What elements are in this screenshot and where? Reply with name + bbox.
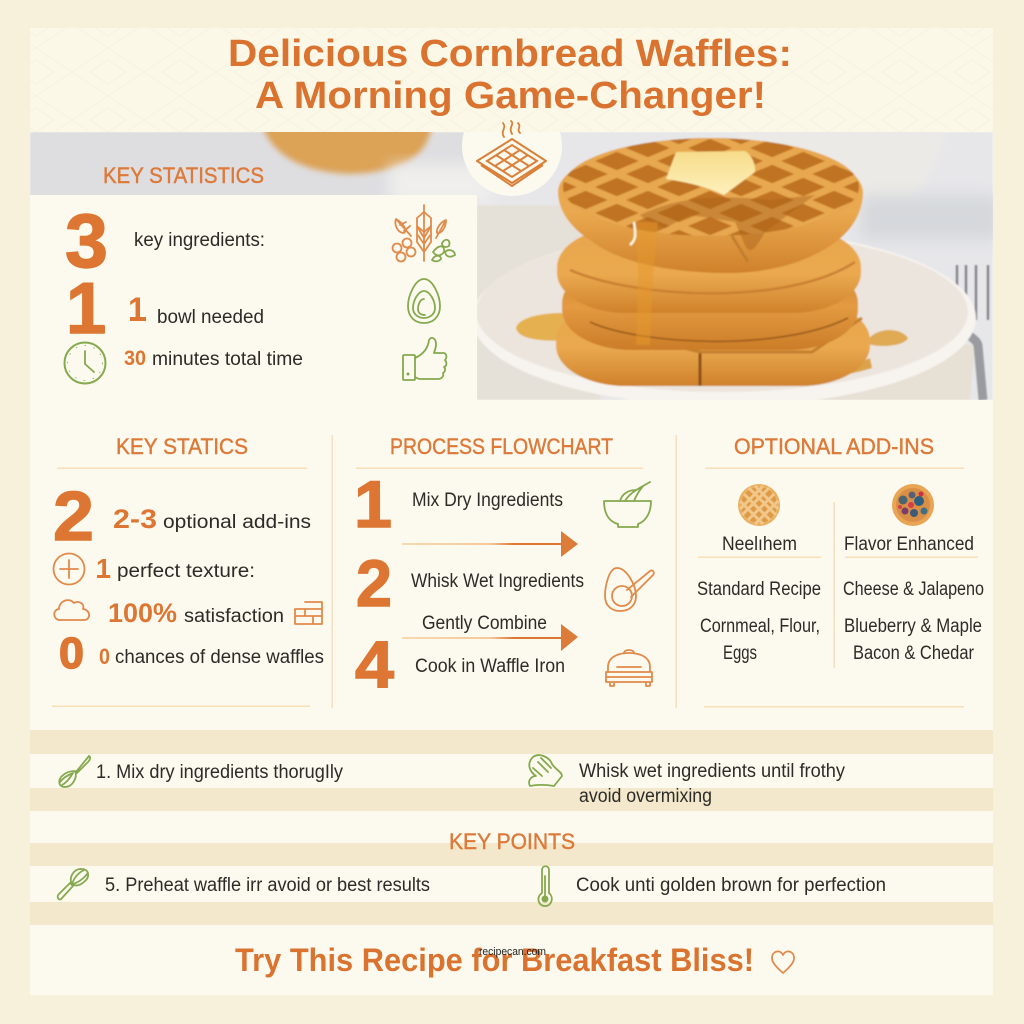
- stat: satisfaction: 100%: [108, 598, 177, 628]
- panel: key statistics top: [30, 163, 477, 410]
- icon: waffle badge: [462, 121, 562, 196]
- napkin: [477, 205, 600, 400]
- stat: perfect texture: [54, 553, 255, 584]
- icon: avocado: [408, 279, 440, 323]
- stat: 1 bowl needed: 1: [128, 291, 146, 329]
- stat: 3 key ingredients: 3: [65, 199, 108, 284]
- header banner: [30, 28, 993, 132]
- title: Delicious Cornbread Waffles:: [228, 33, 792, 75]
- stat: 0 dense waffles: 0: [59, 629, 84, 678]
- stat: satisfaction: [54, 598, 322, 628]
- syrup: [640, 195, 815, 250]
- step 1: [354, 467, 651, 541]
- stat: 30 minutes: 30: [124, 347, 146, 370]
- stat: 0 dense waffles: chances of dense waffles: [115, 647, 324, 668]
- column: flavor enhanced: Cheese & Jalapeno: [843, 579, 984, 600]
- icon: thumbs up: [403, 338, 446, 380]
- column: neelihem: Eggs: [723, 643, 757, 664]
- step 2: 2: [356, 546, 392, 620]
- heading: key statistics: KEY STATISTICS: [103, 163, 264, 188]
- panel: key statics column: [52, 434, 324, 707]
- tip 2: Whisk wet ingredients until frothy: [579, 761, 845, 782]
- stat: 0 dense waffles: 0: [99, 644, 110, 669]
- tip 2: [529, 755, 845, 807]
- tip 1: 1. Mix dry ingredients thorugIly: [96, 762, 343, 783]
- tip 4: Cook unti golden brown for perfection: [576, 875, 886, 896]
- step 1: Mix Dry Ingredients: [412, 490, 563, 511]
- syrup pools: [516, 313, 570, 341]
- blurred bowl: [735, 120, 945, 226]
- step 1: 1: [354, 467, 392, 541]
- icon: plain waffle: [738, 484, 780, 526]
- stat: 2-3 add-ins: [53, 477, 311, 555]
- stat: 0 dense waffles: [59, 629, 324, 678]
- striped tips section: [30, 730, 993, 925]
- stat: 1 bowl needed: [66, 269, 264, 349]
- column: flavor enhanced: [843, 534, 984, 664]
- step 4: 4: [355, 627, 394, 701]
- tip 4: [538, 866, 886, 906]
- step 3: Gently Combine: [422, 613, 547, 634]
- butter: [666, 151, 755, 195]
- waffle 2: [557, 227, 861, 313]
- fork: [957, 265, 988, 400]
- tip 1: [59, 756, 343, 787]
- panel: process flowchart: [354, 434, 654, 701]
- step 2: Whisk Wet Ingredients: [411, 571, 584, 592]
- step 2: [356, 546, 654, 620]
- column: neelihem: Cornmeal, Flour,: [700, 616, 820, 637]
- hero photo: stacked waffles on plate: [30, 132, 993, 400]
- heading: optional add-ins: OPTIONAL ADD-INS: [734, 434, 934, 459]
- title: A Morning Game-Changer!: [255, 75, 766, 117]
- icon: berry waffle: [892, 484, 934, 526]
- stat: perfect texture: 1: [96, 553, 111, 584]
- stat: 1 bowl needed: 1: [66, 269, 106, 349]
- panel: optional add-ins: [697, 434, 984, 708]
- column: neelihem: [697, 534, 821, 664]
- icon: wheat and seeds: [392, 205, 455, 262]
- stat: 3 key ingredients: [65, 199, 265, 284]
- watermark: recipecan.com: [479, 946, 546, 958]
- column: neelihem: Neelıhem: [722, 534, 797, 555]
- arrow 1: [402, 531, 578, 557]
- stat: 2-3 add-ins: 2: [53, 477, 94, 555]
- title: [228, 33, 792, 117]
- column: flavor enhanced: Bacon & Chedar: [853, 643, 975, 664]
- footer call to action: Try This Recipe for Breakfast Bliss!: [235, 942, 754, 978]
- waffle 3: [561, 290, 859, 350]
- stat: 1 bowl needed: bowl needed: [157, 307, 264, 328]
- stat: 3 key ingredients: key ingredients:: [134, 230, 265, 251]
- plate: [477, 241, 977, 400]
- tip 3: 5. Preheat waffle irr avoid or best results: [105, 875, 430, 896]
- column: flavor enhanced: Flavor Enhanced: [844, 534, 974, 555]
- step 4: [355, 627, 652, 701]
- stat: 2-3 add-ins: 2-3: [113, 504, 157, 534]
- blurred tablecloth: [390, 165, 490, 205]
- heading: key points: KEY POINTS: [449, 829, 575, 854]
- waffle 1: [558, 138, 863, 273]
- tip 3: [58, 869, 430, 900]
- stat: satisfaction: satisfaction: [184, 606, 284, 627]
- heading: key statics: KEY STATICS: [116, 434, 248, 459]
- heading: process flowchart: PROCESS FLOWCHART: [390, 434, 613, 459]
- arrow 2: [402, 624, 578, 651]
- stat: 30 minutes: minutes total time: [152, 349, 303, 370]
- step 4: Cook in Waffle Iron: [415, 656, 565, 677]
- stat: perfect texture: perfect texture:: [117, 561, 255, 582]
- tip 2: avoid overmixing: [579, 786, 712, 807]
- stat: 2-3 add-ins: optional add-ins: [163, 512, 311, 533]
- waffle grid: [562, 138, 860, 236]
- waffle 4: [555, 316, 871, 387]
- column: flavor enhanced: Blueberry & Maple: [844, 616, 982, 637]
- column: neelihem: Standard Recipe: [697, 579, 821, 600]
- blurred waffle background: [262, 125, 432, 174]
- icon: clock: [64, 342, 106, 384]
- icon: heart: [772, 951, 794, 973]
